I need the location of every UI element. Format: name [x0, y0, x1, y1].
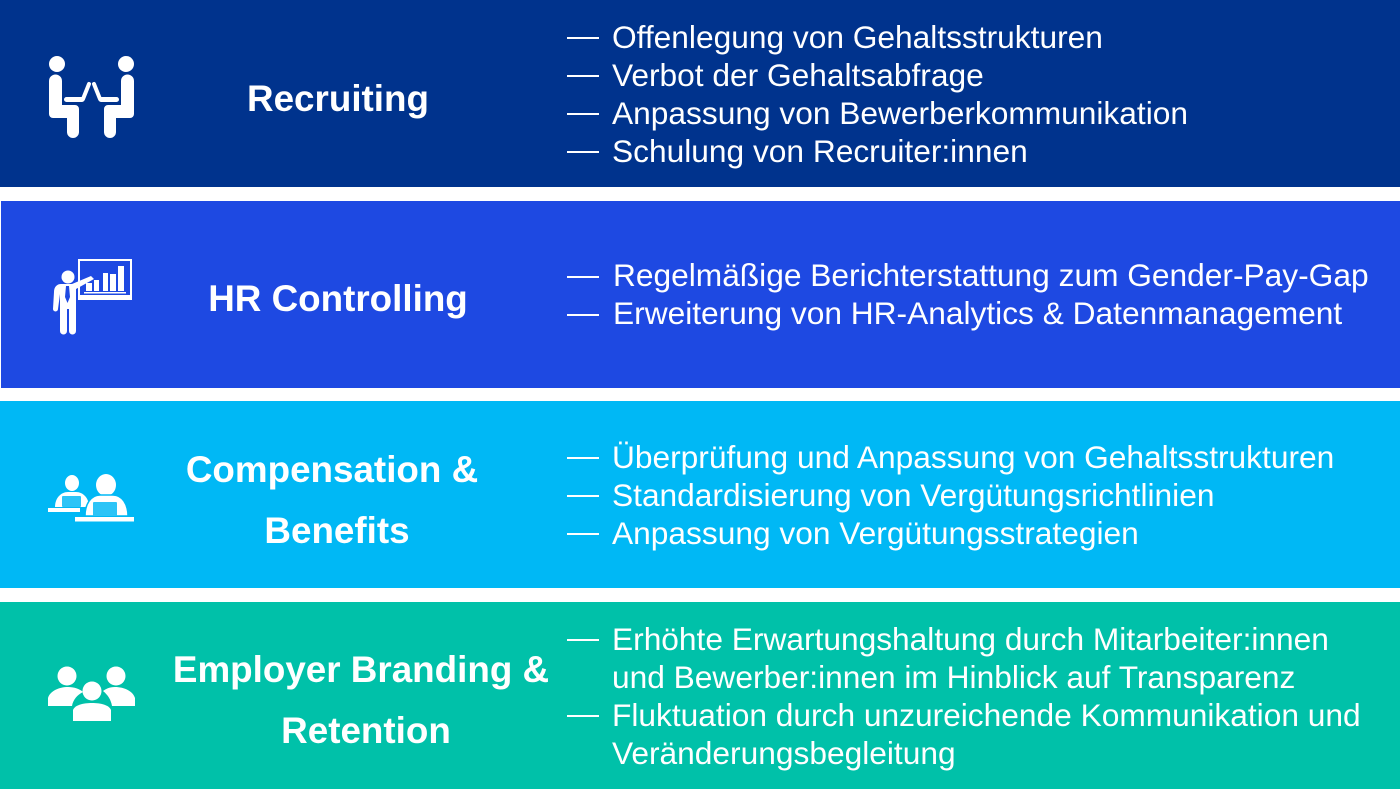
- list: Employer Branding measures: und Bewerber:innen im Hinblick auf Transparenz: [612, 659, 1295, 695]
- list: Recruiting measures: Anpassung von Bewerberkommunikation: [612, 95, 1188, 131]
- panel: Employer Branding & Retention: [0, 602, 1400, 789]
- list: HR Controlling measures: Erweiterung von HR-Analytics & Datenmanagement: [613, 295, 1342, 331]
- list: Recruiting measures: Schulung von Recruiter:innen: [612, 133, 1028, 169]
- heading line: Retention: Retention: [281, 710, 451, 751]
- list: Recruiting measures: Offenlegung von Gehaltsstrukturen: [612, 19, 1103, 55]
- heading: HR Controlling: HR Controlling: [208, 278, 468, 319]
- list: HR Controlling measures: [567, 257, 1369, 331]
- heading: Employer Branding &: Employer Branding &: [173, 649, 549, 690]
- list: Compensation measures: [567, 439, 1334, 551]
- list: Employer Branding measures: Fluktuation durch unzureichende Kommunikation und: [612, 697, 1361, 733]
- icon: presenter with bar chart: [53, 259, 132, 334]
- list: Recruiting measures: Verbot der Gehaltsabfrage: [612, 57, 984, 93]
- heading: Recruiting: Recruiting: [247, 78, 429, 119]
- icon: group of three people: [48, 666, 135, 721]
- icon: two people at a table: [49, 56, 134, 138]
- list: Recruiting measures: [567, 19, 1188, 169]
- panel: HR Controlling: [1, 201, 1400, 388]
- list: Employer Branding measures: Veränderungsbegleitung: [612, 735, 956, 771]
- list: Compensation measures: Überprüfung und Anpassung von Gehaltsstrukturen: [612, 439, 1334, 475]
- list: Employer Branding measures: [567, 621, 1361, 771]
- list: Employer Branding measures: Erhöhte Erwartungshaltung durch Mitarbeiter:innen: [612, 621, 1329, 657]
- panel: Recruiting: [0, 0, 1400, 187]
- list: HR Controlling measures: Regelmäßige Berichterstattung zum Gender-Pay-Gap: [613, 257, 1369, 293]
- panel: Compensation & Benefits: [0, 401, 1400, 588]
- heading: Compensation & Benefits: Compensation &: [186, 449, 478, 490]
- icon: two people at laptops: [48, 474, 134, 522]
- list: Compensation measures: Anpassung von Vergütungsstrategien: [612, 515, 1139, 551]
- heading line: Benefits: Benefits: [264, 510, 410, 551]
- list: Compensation measures: Standardisierung von Vergütungsrichtlinien: [612, 477, 1214, 513]
